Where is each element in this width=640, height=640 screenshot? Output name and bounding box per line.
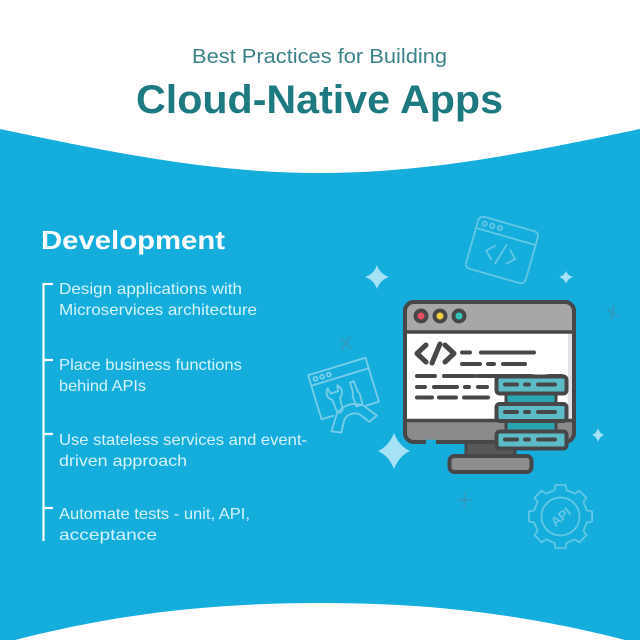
blue background panel — [0, 129, 640, 640]
bullet list — [59, 281, 307, 544]
code glyph — [417, 344, 454, 363]
item 3: Use stateless services and event- — [59, 432, 307, 449]
item 4 — [59, 506, 250, 544]
item 2 — [59, 357, 242, 395]
item 2: Place business functions — [59, 357, 242, 374]
code lines — [417, 352, 562, 398]
window buttons — [416, 310, 464, 322]
title: Cloud-Native Apps — [136, 78, 503, 122]
item 1: Microservices architecture — [59, 302, 257, 319]
small crosses — [341, 306, 617, 507]
title — [136, 46, 503, 122]
sparkles — [365, 265, 604, 469]
item 1 — [59, 281, 257, 319]
item 1: Design applications with — [59, 281, 242, 298]
monitor body — [405, 302, 574, 442]
icon: code window outline — [465, 216, 539, 284]
item 3: driven approach — [59, 453, 187, 470]
icon: API gear outline: API — [548, 504, 574, 530]
server stack — [496, 376, 566, 448]
bracket timeline — [44, 284, 53, 541]
illustration: monitor with server stack — [405, 302, 574, 472]
icon: tools window outline — [308, 358, 384, 437]
item 4: acceptance — [59, 527, 157, 544]
item 4: Automate tests - unit, API, — [59, 506, 250, 523]
heading: Development: Development — [41, 225, 225, 255]
item 3 — [59, 432, 307, 470]
title: Best Practices for Building — [192, 46, 447, 68]
item 2: behind APIs — [59, 378, 146, 395]
monitor stand — [450, 442, 532, 472]
icon: API gear outline — [529, 485, 592, 548]
